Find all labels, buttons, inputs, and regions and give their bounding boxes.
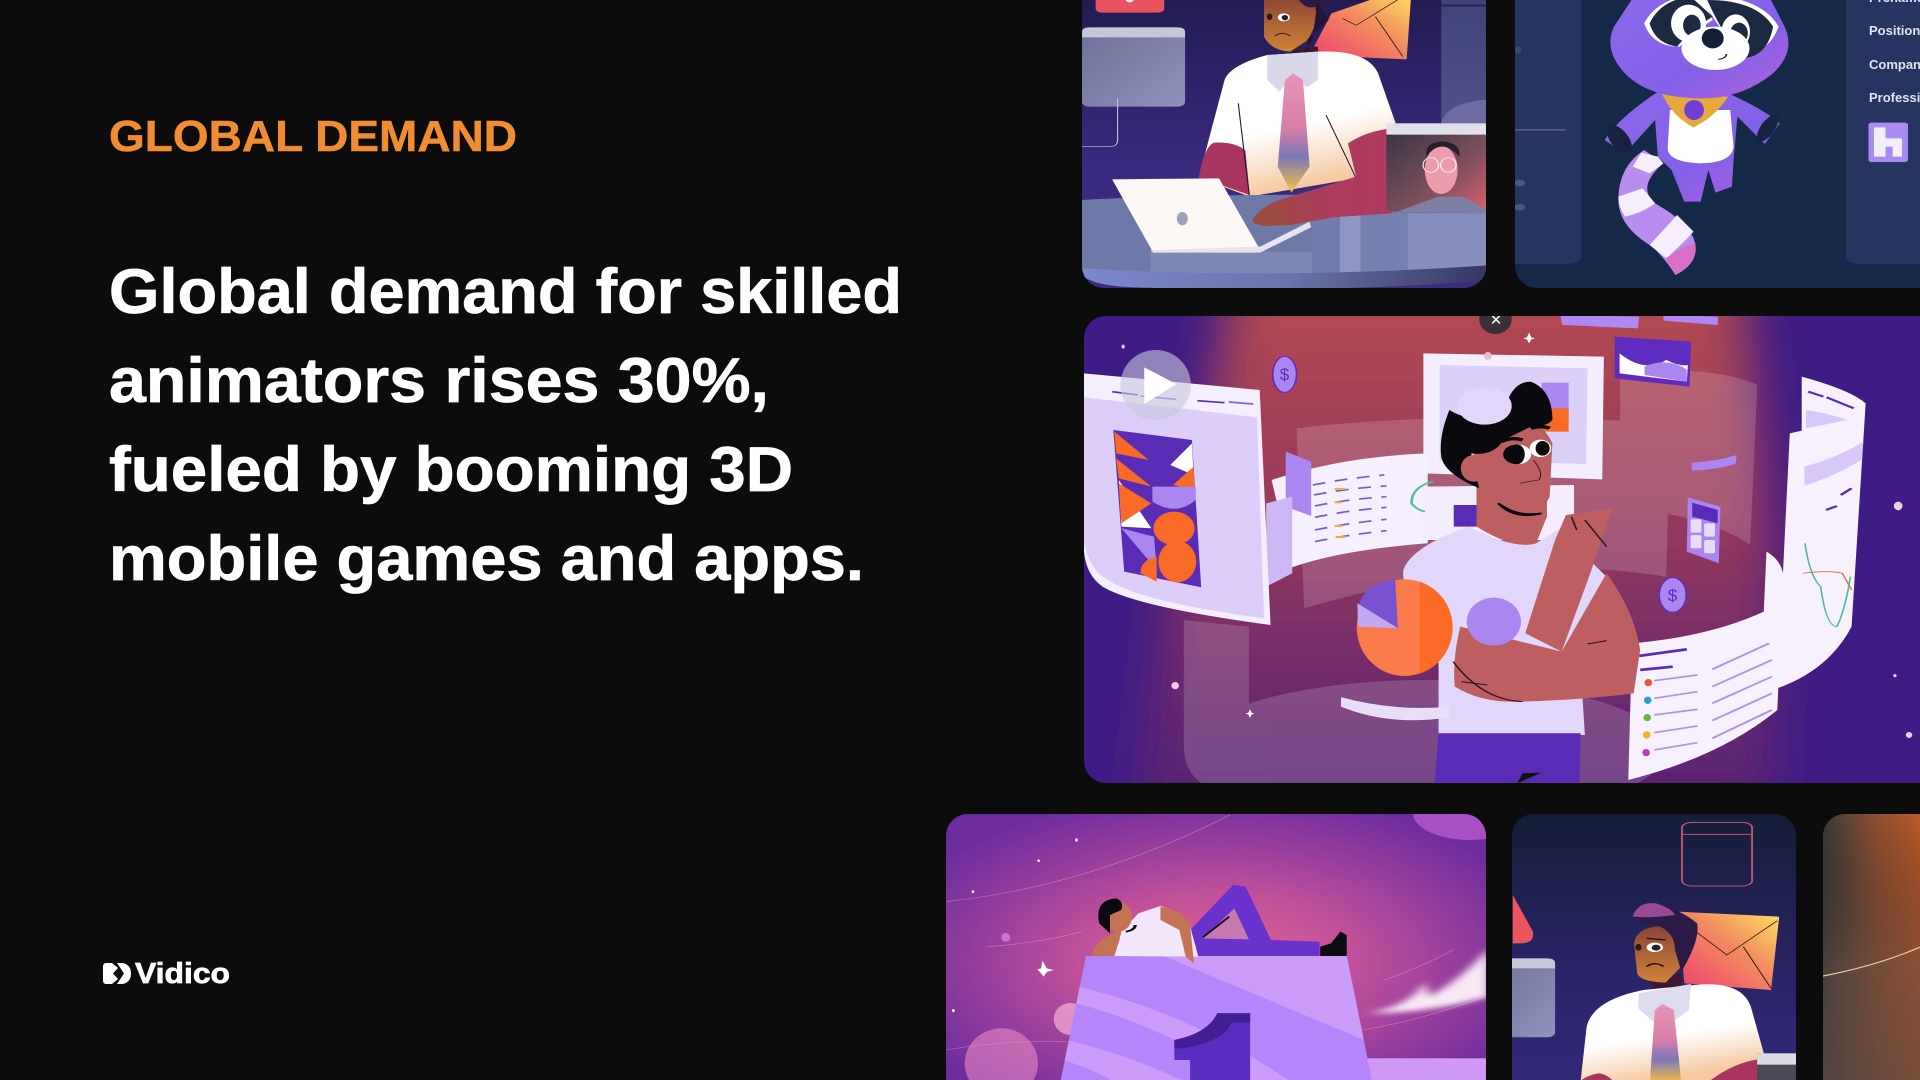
icon: envelope [1310, 0, 1411, 59]
sparkle dots [1121, 333, 1912, 738]
close glyph: ✕ [1490, 312, 1502, 329]
floating arc [1341, 697, 1450, 720]
panel: figure reclining on number one podium [946, 814, 1486, 1080]
form labels: Position [1869, 23, 1920, 38]
small chart card [1615, 337, 1691, 387]
side panels [1499, 0, 1920, 264]
icon: building badge [1868, 123, 1908, 162]
coin symbol left: $ [1280, 365, 1290, 384]
desk [1082, 195, 1493, 289]
back poster [1423, 352, 1604, 479]
panel: cropped orange gradient video [1823, 814, 1920, 1080]
calculator [1687, 497, 1720, 563]
lower right table [1628, 552, 1783, 780]
raccoon body [1602, 90, 1783, 202]
section label: GLOBAL DEMAND [109, 112, 517, 161]
animator figure [1403, 382, 1640, 787]
bubbles and stars [952, 838, 1087, 1080]
left curved screen [1084, 373, 1271, 625]
raccoon tail [1618, 150, 1696, 275]
panel: worker with envelope, cropped [1486, 810, 1801, 1080]
play button [1120, 350, 1191, 420]
right curved screen [1777, 377, 1866, 688]
worker [1577, 903, 1801, 1080]
red shard [1513, 895, 1533, 943]
video call window [1386, 123, 1496, 213]
icon: envelope [1677, 912, 1779, 990]
orbit lines [946, 815, 1486, 1050]
panel: office worker at laptop [1082, 0, 1486, 288]
translucent rear screens [1184, 369, 1757, 820]
forearm and hand [1252, 128, 1392, 226]
headline: animators rises 30%, [109, 346, 769, 416]
icons: dollar coins [1273, 356, 1686, 612]
coin symbol right: $ [1668, 586, 1678, 605]
logo: Vidico [103, 958, 230, 990]
icon: red notification tag [1096, 0, 1164, 13]
headline: mobile games and apps. [109, 524, 864, 594]
panel: raccoon mascot [1499, 0, 1920, 288]
reclining figure [1091, 885, 1347, 963]
window outline [1682, 822, 1752, 886]
worker figure [1199, 0, 1396, 197]
raccoon head [1610, 0, 1788, 98]
logo: Vidico: Vidico [135, 958, 230, 990]
floor [1366, 1058, 1492, 1080]
rear data table [1266, 452, 1574, 587]
headline: fueled by booming 3D [109, 435, 793, 505]
headline: Global demand for skilled [109, 257, 902, 327]
grey floating window [1082, 27, 1185, 147]
pie chart [1357, 579, 1453, 676]
laptop [1112, 178, 1311, 253]
headline [109, 257, 902, 594]
form labels [1869, 0, 1920, 105]
close button [1479, 316, 1512, 334]
podium [1056, 956, 1373, 1080]
purple circle [1467, 598, 1521, 646]
panel: main video, animator with holographic screens [1084, 316, 1920, 783]
motion swoosh [1366, 948, 1489, 1013]
grey panel [1486, 958, 1555, 1037]
